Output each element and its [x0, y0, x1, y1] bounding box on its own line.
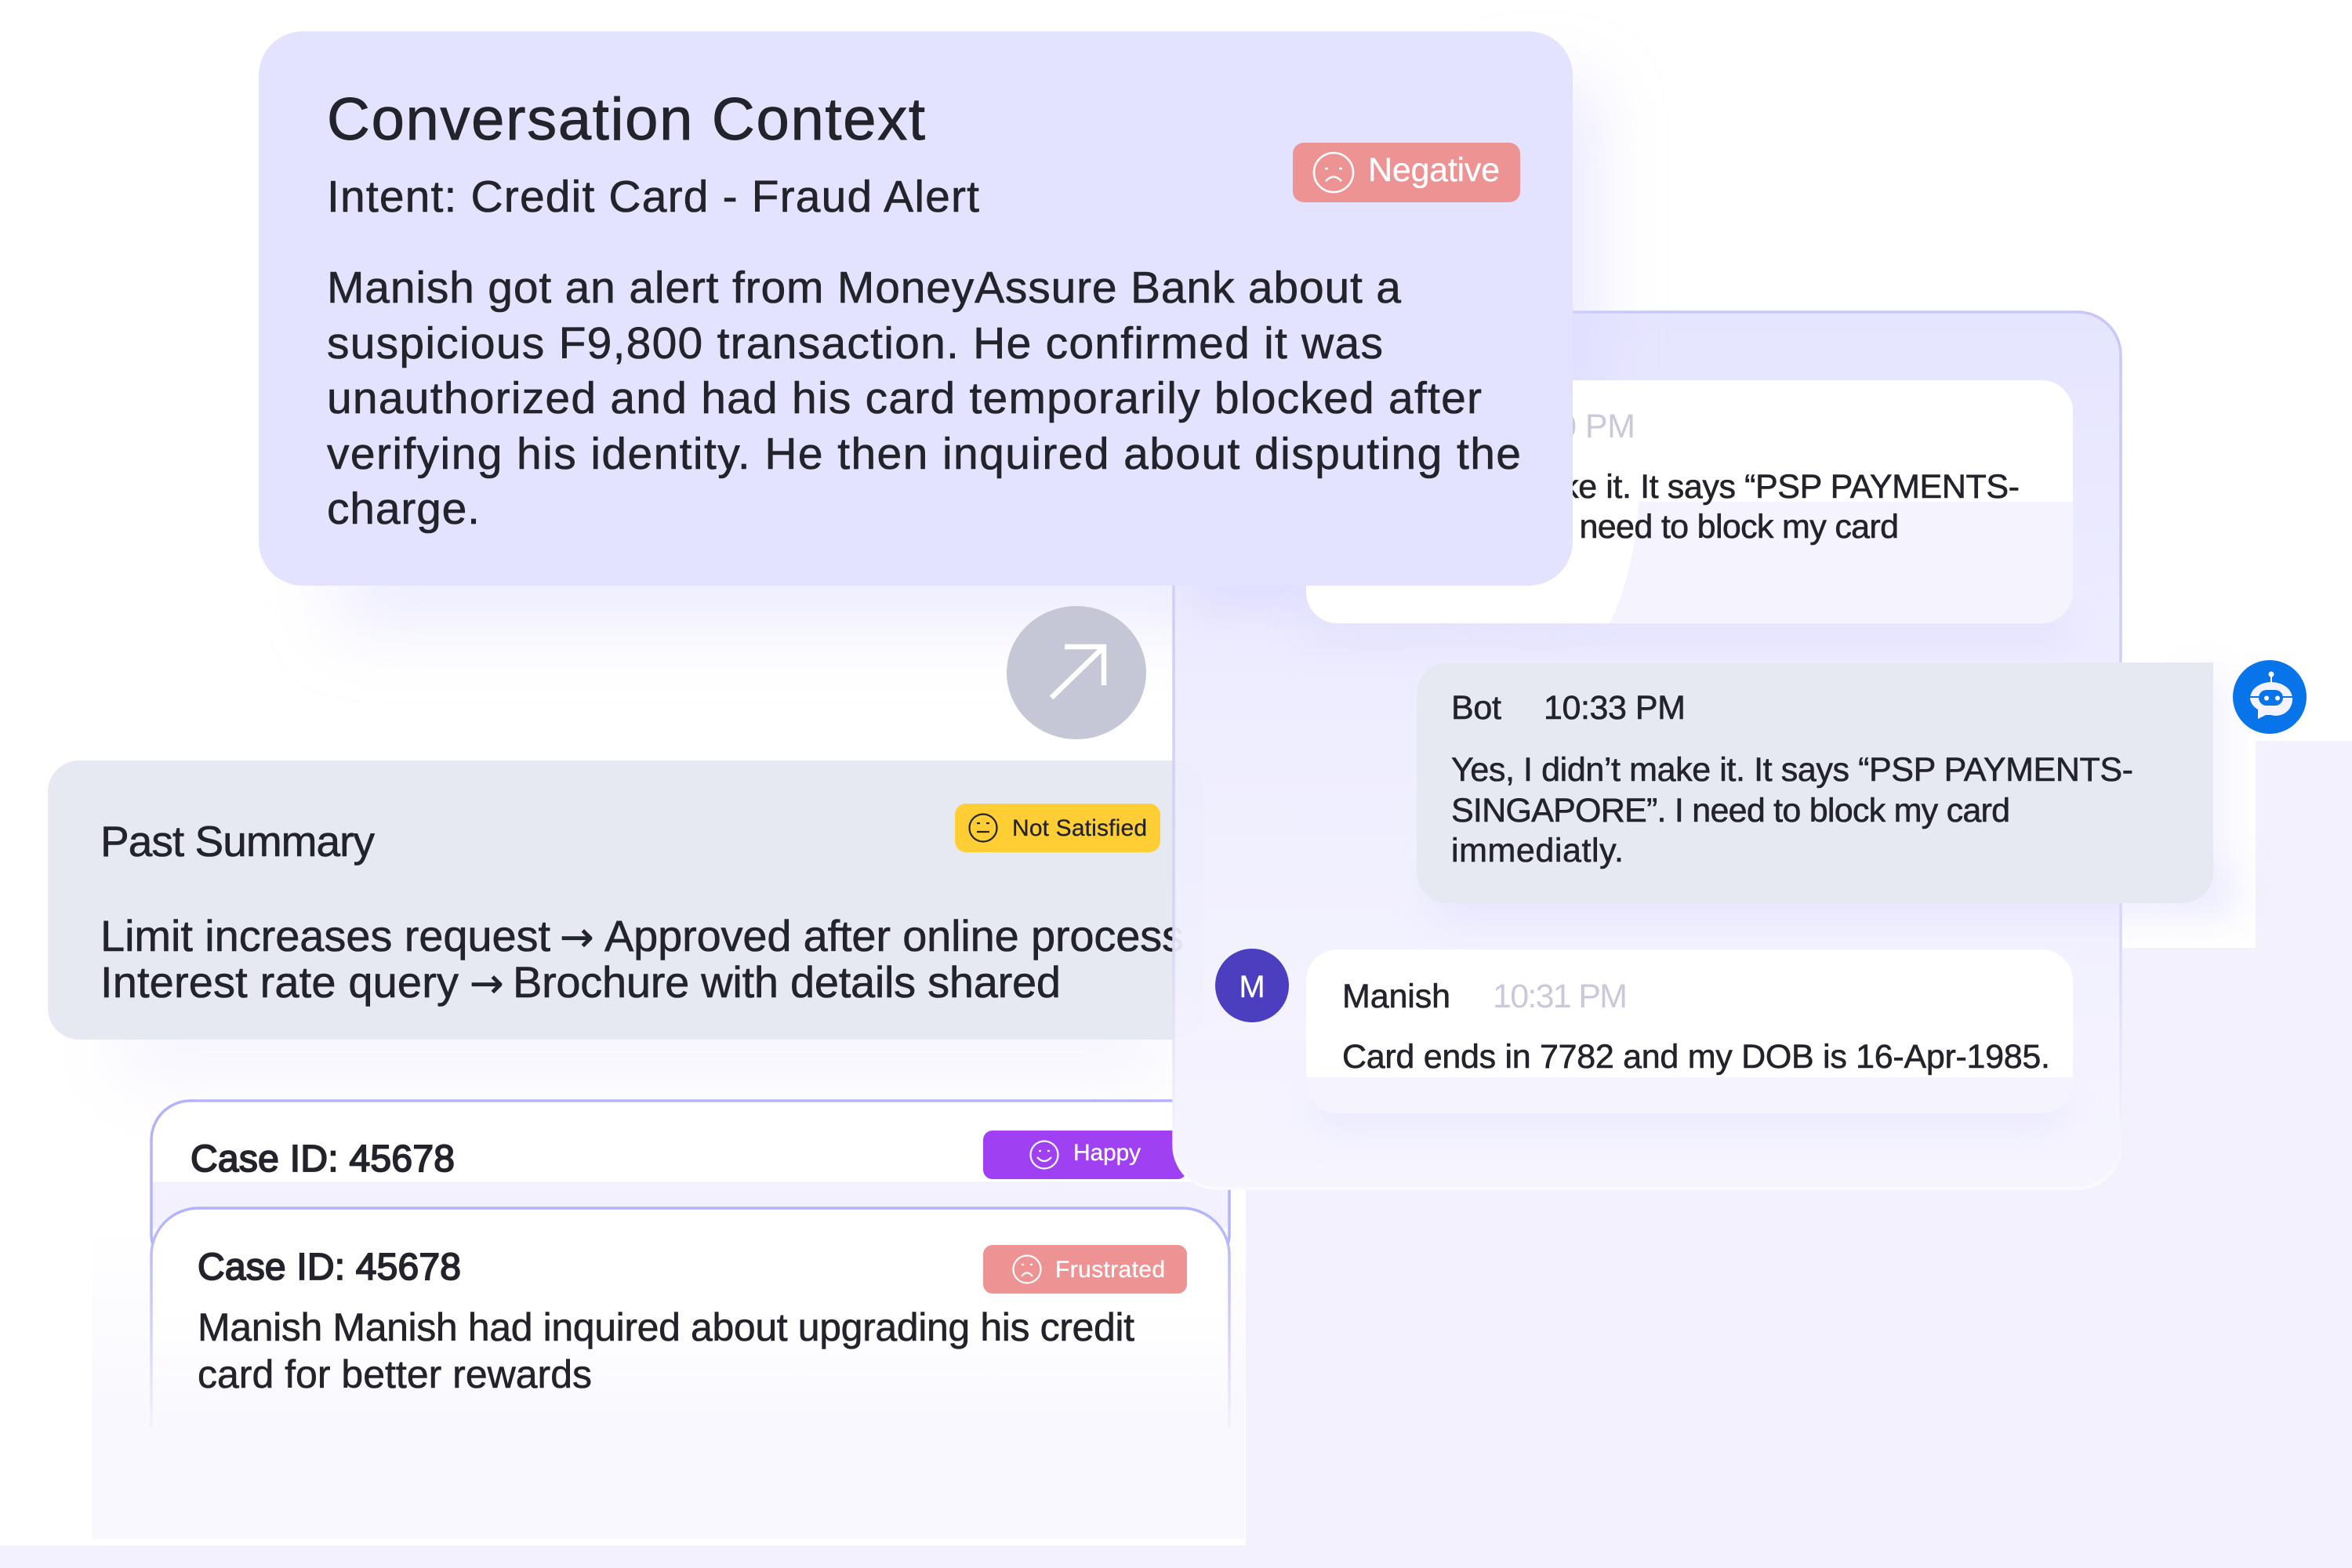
heading: conversation context: Conversation Context: [327, 86, 925, 153]
panel: past summary: [48, 760, 1203, 1040]
text: past summary items: Approved after online process: [604, 911, 1184, 960]
badge: frustrated: [983, 1245, 1187, 1294]
heading: past summary: Past Summary: [100, 817, 375, 866]
text: sender and time: [1342, 978, 1628, 1015]
text: past summary items: [100, 911, 1184, 1007]
text: sender and time: Bot: [1451, 689, 1501, 727]
text: past summary items: Limit increases request: [100, 911, 550, 960]
text: message: immediatly.: [1451, 832, 1624, 869]
text: sender and time: Manish: [1342, 408, 1450, 445]
panel: case card 1: [151, 1101, 1229, 1273]
text: summary: Manish got an alert from MoneyAssure Bank about a: [327, 263, 1401, 313]
badge: frustrated: Frustrated: [1055, 1257, 1165, 1283]
text: sender and time: [1451, 689, 1686, 727]
text: summary: verifying his identity. He then inquired about disputing the: [327, 429, 1521, 479]
badge: negative: [1293, 143, 1520, 202]
text: case description: [198, 1305, 1134, 1396]
text: sender and time: 10:31 PM: [1493, 978, 1628, 1015]
text: summary: charge.: [327, 484, 480, 534]
text: summary: [327, 263, 1521, 534]
text: case description: Manish Manish had inquired about upgrading his credit: [198, 1305, 1134, 1349]
text: past summary items: Interest rate query: [100, 957, 459, 1007]
text: past summary items: →: [470, 960, 504, 1007]
text: message: SINGAPORE”. I need to block my card: [1338, 508, 1899, 546]
text: case id: Case ID: 45678: [191, 1138, 455, 1180]
text: case description: card for better rewards: [198, 1352, 592, 1396]
text: message: [1338, 468, 2020, 546]
text: message: SINGAPORE”. I need to block my card: [1451, 792, 2010, 829]
text: summary: unauthorized and had his card temporarily blocked after: [327, 373, 1482, 423]
badge: not satisfied: Not Satisfied: [1012, 815, 1147, 841]
text: past summary items: Brochure with details shared: [513, 957, 1061, 1007]
chat message: bot: [1417, 662, 2234, 917]
icon: bot avatar: [2233, 660, 2307, 734]
text: summary: suspicious F9,800 transaction. He confirmed it was: [327, 318, 1383, 368]
badge: happy: Happy: [1073, 1140, 1141, 1166]
text: sender and time: 10:33 PM: [1544, 689, 1686, 727]
chat message: customer bottom: [1306, 949, 2073, 1121]
panel: conversation context: [259, 31, 1573, 586]
panel: chat window: [1174, 86, 2121, 1189]
text: sender and time: Manish: [1342, 978, 1450, 1015]
text: sender and time: [1342, 408, 1635, 445]
badge: not satisfied: [955, 804, 1160, 852]
text: message: Yes, I didn’t make it. It says “PSP PAYMENTS-: [1451, 751, 2133, 789]
text: message: Card ends in 7782 and my DOB is 16-Apr-1985.: [1342, 1038, 2050, 1076]
badge: negative: Negative: [1368, 151, 1500, 189]
avatar: M: [1215, 949, 1289, 1022]
text: sender and time: 10:30 PM: [1494, 408, 1635, 445]
icon: arrow circle: [1007, 606, 1146, 739]
avatar: M: M: [1239, 970, 1265, 1004]
text: case id: Case ID: 45678: [198, 1247, 461, 1288]
panel: case card 2: [151, 1208, 1229, 1427]
text: intent: Intent: Credit Card - Fraud Alert: [327, 172, 979, 222]
text: message: Yes, I didn’t make it. It says “PSP PAYMENTS-: [1338, 468, 2020, 506]
text: past summary items: →: [560, 914, 594, 961]
text: message: [1451, 751, 2133, 869]
badge: happy: [983, 1131, 1187, 1179]
chat message: customer top: [1306, 380, 2073, 643]
